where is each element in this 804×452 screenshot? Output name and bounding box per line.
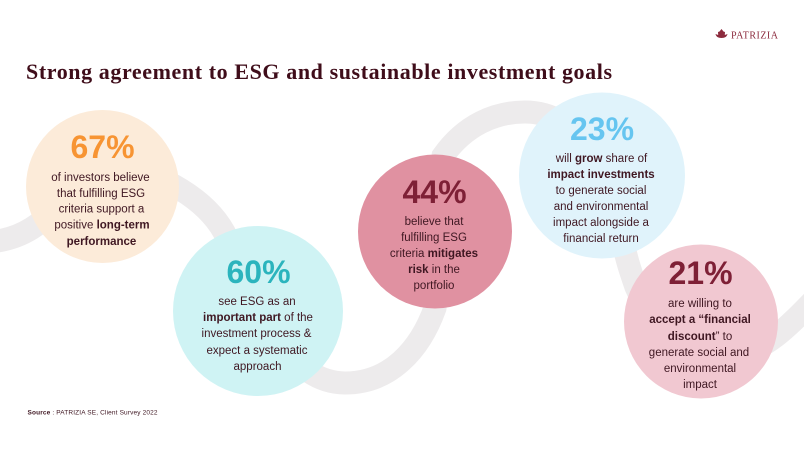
stat: 21%: 21% — [668, 255, 733, 291]
description: 60%: see ESG as an — [218, 296, 296, 308]
description: 67% — [51, 172, 150, 248]
description: 60%: investment process & — [202, 328, 312, 340]
panel: 60% — [173, 226, 343, 396]
description: 21%: impact — [683, 379, 718, 391]
description: 23% — [547, 153, 655, 245]
description: 67%: of investors believe — [51, 172, 150, 184]
description: 23%: will grow share of — [555, 153, 648, 165]
panel: 23% — [519, 92, 685, 258]
title: Strong agreement to ESG and sustainable investment goals — [26, 59, 612, 84]
description: 60%: important part of the — [203, 312, 313, 324]
description: 67%: positive long-term — [54, 220, 150, 232]
source note: Source : PATRIZIA SE, Client Survey 2022 — [28, 410, 158, 416]
ribbon connecting the circles — [0, 112, 804, 383]
description: 21%: environmental — [664, 363, 736, 375]
description: 60%: approach — [234, 361, 281, 373]
description: 23%: impact investments — [547, 169, 655, 181]
description: 67%: performance — [67, 236, 136, 248]
panel: 21% — [624, 244, 778, 398]
description: 44% — [390, 216, 478, 292]
stat: 23%: 23% — [570, 111, 634, 147]
description: 44%: believe that — [405, 216, 464, 228]
description: 21%: accept a “financial — [649, 314, 751, 326]
stat: 44%: 44% — [402, 174, 467, 210]
icon: lotus flower — [716, 29, 728, 38]
description: 67%: that fulfilling ESG — [57, 188, 145, 200]
panel: 44% — [358, 154, 512, 308]
stat: 60%: 60% — [226, 254, 291, 290]
description: 67%: criteria support a — [59, 204, 145, 216]
description: 21% — [649, 298, 751, 391]
description: 44%: portfolio — [414, 280, 454, 292]
description: 21%: are willing to — [668, 298, 732, 310]
description: 44%: fulfilling ESG — [401, 232, 467, 244]
description: 21%: generate social and — [649, 347, 749, 359]
description: 44%: criteria mitigates — [390, 248, 478, 260]
description: 60% — [202, 296, 313, 373]
description: 21%: discount” to — [668, 331, 732, 343]
panel: 67% — [26, 110, 179, 263]
stat: 67%: 67% — [70, 129, 135, 165]
description: 23%: financial return — [563, 233, 639, 245]
description: 23%: and environmental — [554, 201, 648, 213]
logo: PATRIZIA — [716, 29, 779, 42]
logo wordmark: PATRIZIA — [731, 30, 779, 42]
description: 23%: impact alongside a — [553, 217, 650, 229]
description: 44%: risk in the — [408, 264, 460, 276]
description: 23%: to generate social — [556, 185, 646, 197]
description: 60%: expect a systematic — [207, 345, 308, 357]
